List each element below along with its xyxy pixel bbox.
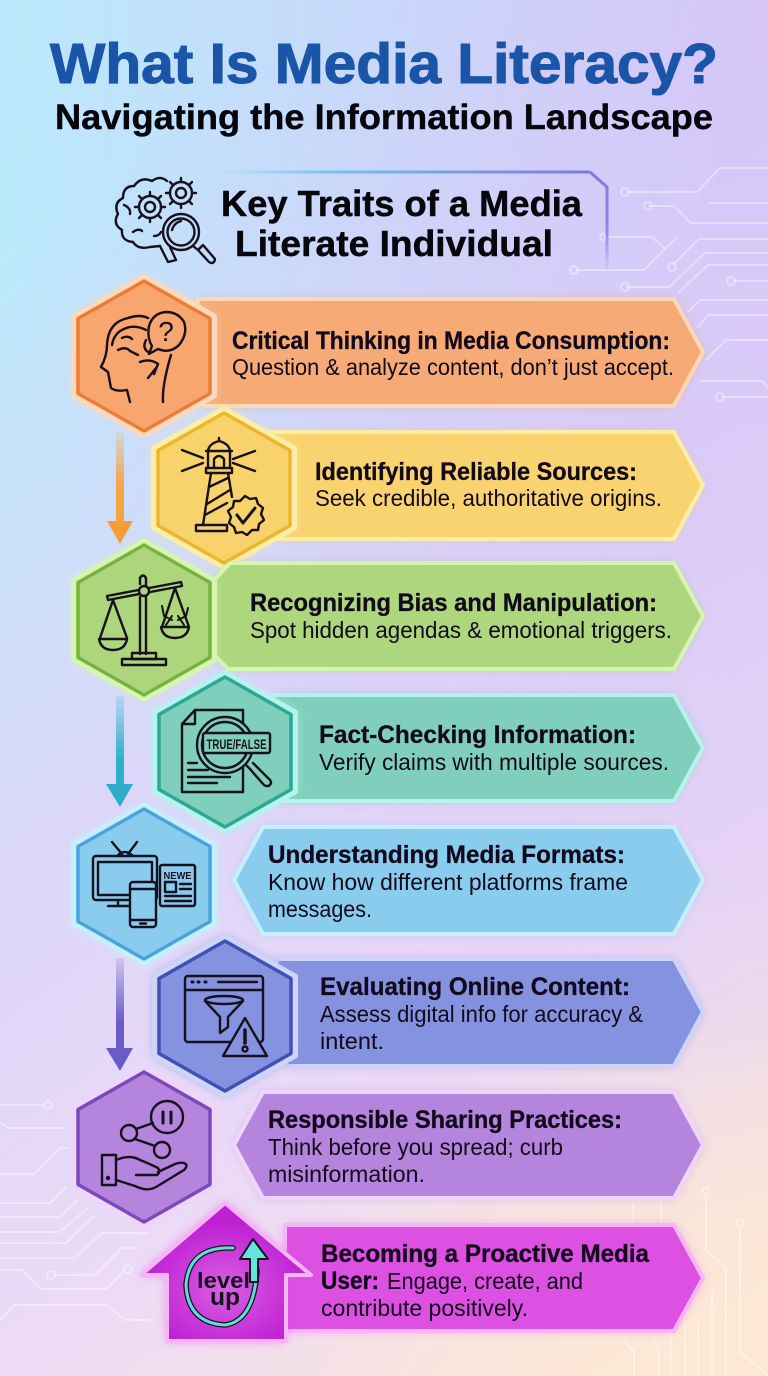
banner text: Identifying Reliable Sources: xyxy=(315,458,637,486)
banner text: Responsible Sharing Practices: xyxy=(268,1106,622,1134)
icon label: level xyxy=(197,1268,250,1293)
hexagon: online content icon xyxy=(154,936,296,1096)
hexagon: reliable sources icon xyxy=(153,408,295,568)
header frame xyxy=(215,172,607,272)
banner text: Recognizing Bias and Manipulation: xyxy=(250,589,657,617)
icon: tv, phone and newspaper xyxy=(93,842,195,927)
banner text: Evaluating Online Content: xyxy=(320,973,630,1001)
banner: critical thinking xyxy=(192,299,703,406)
banner text xyxy=(268,841,628,922)
banner text: Think before you spread; curb xyxy=(268,1134,563,1160)
banner text xyxy=(321,1240,650,1321)
icon: document with magnifier and true/false tag xyxy=(182,710,271,792)
house: level up icon xyxy=(141,1203,311,1341)
banner: media formats xyxy=(234,827,703,934)
icon: hand with share nodes and pause xyxy=(102,1101,186,1189)
banner text: Know how different platforms frame xyxy=(268,869,628,895)
banner text xyxy=(232,327,674,380)
arrow: teal xyxy=(106,696,133,807)
circuit pattern: top right xyxy=(570,168,768,401)
icon: brain with gears and magnifier xyxy=(116,178,215,263)
banner text xyxy=(315,458,662,511)
icon: document with magnifier and true/false tag: TRUE/FALSE xyxy=(206,737,266,752)
circuit pattern: bottom left xyxy=(0,1101,150,1320)
banner text: User: xyxy=(321,1267,379,1295)
hexagon: fact-checking icon xyxy=(154,672,296,832)
section header panel: Literate Individual xyxy=(235,223,553,264)
banner text xyxy=(319,721,669,775)
banner text: Becoming a Proactive Media xyxy=(321,1240,650,1268)
banner text: Verify claims with multiple sources. xyxy=(319,749,669,775)
section header panel xyxy=(116,172,607,272)
banner text: Seek credible, authoritative origins. xyxy=(315,485,662,511)
arrow: indigo xyxy=(106,958,133,1071)
icon: tv, phone and newspaper: NEWE xyxy=(164,870,192,882)
banner text xyxy=(250,589,672,643)
banner text: Spot hidden agendas & emotional triggers. xyxy=(250,617,672,643)
icon label xyxy=(197,1268,250,1311)
hexagon: bias icon xyxy=(73,540,215,700)
icon: lighthouse with badge xyxy=(182,438,264,535)
arrow: orange xyxy=(107,432,133,544)
header text: Key Traits of a Media xyxy=(221,183,583,224)
title: What Is Media Literacy? xyxy=(50,32,718,96)
banner: fact-checking xyxy=(273,695,703,801)
subtitle: Navigating the Information Landscape xyxy=(55,98,713,137)
hexagon: media formats icon xyxy=(73,804,215,964)
icon label: up xyxy=(210,1284,240,1311)
banner: online content xyxy=(270,959,703,1066)
banner text: Assess digital info for accuracy & xyxy=(320,1001,643,1027)
banner text: Critical Thinking in Media Consumption: xyxy=(232,327,670,355)
icon: scales of justice xyxy=(99,576,189,665)
banner: proactive media user xyxy=(285,1225,703,1331)
banner text: Fact-Checking Information: xyxy=(319,721,636,749)
banner text: Understanding Media Formats: xyxy=(268,841,625,869)
banner text: Engage, create, and xyxy=(387,1268,583,1294)
banner: bias and manipulation xyxy=(205,563,703,669)
hexagon: responsible sharing icon xyxy=(73,1067,215,1227)
circuit pattern: bottom right xyxy=(624,1188,768,1376)
hexagon: critical thinking icon xyxy=(73,276,215,436)
banner text: contribute positively. xyxy=(321,1295,528,1321)
banner text: Question & analyze content, don’t just accept. xyxy=(232,354,674,380)
icon: level up circular arrow xyxy=(186,1239,268,1325)
banner text: messages. xyxy=(268,896,372,922)
banner: reliable sources xyxy=(270,432,703,539)
banner text xyxy=(320,973,643,1054)
icon: head with question bubble xyxy=(101,312,185,402)
banner text: misinformation. xyxy=(268,1161,425,1187)
banner: responsible sharing xyxy=(234,1092,703,1198)
icon: browser window with funnel and warning xyxy=(185,976,267,1056)
banner text xyxy=(268,1106,622,1187)
icon: head with question bubble: ? xyxy=(158,316,174,347)
banner text: intent. xyxy=(320,1028,384,1054)
